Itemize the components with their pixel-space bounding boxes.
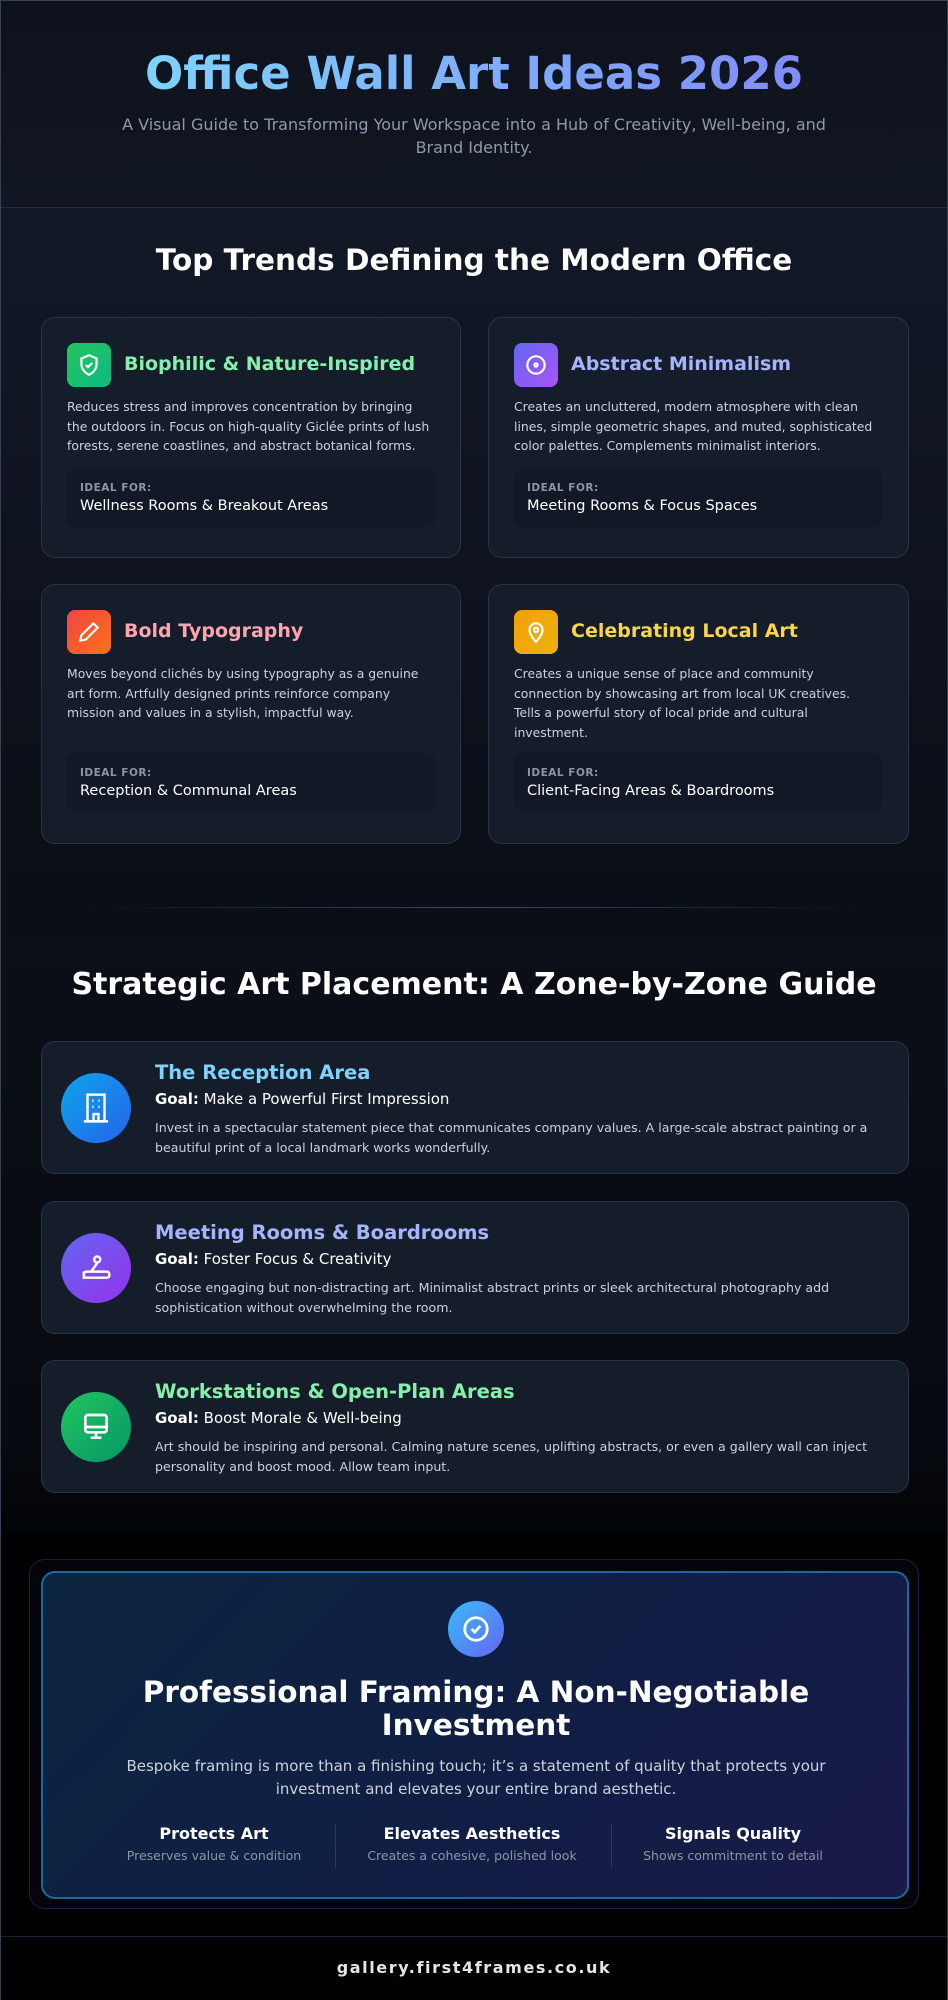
zone goal: Goal: Boost Morale & Well-being [155,1409,402,1427]
ideal for [67,468,435,527]
card title: Bold Typography [124,620,303,642]
framing text: Bespoke framing is more than a finishing touch; it’s a statement of quality that protects your investment and elevates your entire brand aesthetic. [126,1757,826,1798]
divider line [81,907,867,908]
zone text: Choose engaging but non-distracting art. Minimalist abstract prints or sleek architectural photography add sophistication without overwhelming the room. [155,1280,829,1315]
ideal for [67,753,435,812]
stat: protects: Protects Art [159,1824,269,1843]
icon: compass [514,343,558,387]
icon: presentation [61,1233,131,1303]
zone text: Art should be inspiring and personal. Calming nature scenes, uplifting abstracts, or even a gallery wall can inject personality and boost mood. Allow team input. [155,1439,867,1474]
footer [1,1936,947,2000]
icon: pen [67,610,111,654]
card: local art [488,584,909,844]
ideal for: IDEAL FOR: [80,767,152,779]
ideal for: Wellness Rooms & Breakout Areas [80,498,328,514]
zone goal: Goal: Make a Powerful First Impression [155,1090,449,1108]
zone: workstations [41,1360,909,1493]
section: trends [1,208,947,933]
card title: Abstract Minimalism [571,353,791,375]
ideal for: Meeting Rooms & Focus Spaces [527,498,757,514]
ideal for: Reception & Communal Areas [80,783,297,799]
zone title: The Reception Area [155,1061,370,1084]
ideal for: IDEAL FOR: [527,482,599,494]
icon: monitor [61,1392,131,1462]
footer: gallery.first4frames.co.uk [337,1958,611,1977]
icon: building [61,1073,131,1143]
card text: Moves beyond clichés by using typography as a genuine art form. Artfully designed prints reinforce company mission and values in a stylish, impactful way. [67,666,418,720]
placement heading: Strategic Art Placement: A Zone-by-Zone Guide [71,967,877,1002]
stat: quality [643,1824,823,1863]
stat: elevates [367,1824,577,1863]
card: biophilic [41,317,461,558]
icon: check circle [448,1601,504,1657]
icon: shield [67,343,111,387]
card title: Celebrating Local Art [571,620,798,642]
zone goal: Goal: Foster Focus & Creativity [155,1250,391,1268]
title: Office Wall Art Ideas 2026 [145,47,803,100]
ideal for: Client-Facing Areas & Boardrooms [527,783,774,799]
card text: Creates an uncluttered, modern atmosphere with clean lines, simple geometric shapes, and muted, sophisticated color palettes. Complements minimalist interiors. [514,399,872,453]
panel: framing [41,1571,909,1899]
card text: Reduces stress and improves concentration by bringing the outdoors in. Focus on high-quality Giclée prints of lush forests, serene coastlines, and abstract botanical forms. [67,399,429,453]
trends heading: Top Trends Defining the Modern Office [156,243,792,277]
zone text: Invest in a spectacular statement piece that communicates company values. A large-scale abstract painting or a beautiful print of a local landmark works wonderfully. [155,1120,867,1155]
ideal for [514,753,882,812]
zone title: Meeting Rooms & Boardrooms [155,1221,489,1244]
divider [335,1824,336,1868]
stat: elevates: Elevates Aesthetics [384,1824,560,1843]
stat: protects: Preserves value & condition [127,1848,301,1863]
stat: elevates: Creates a cohesive, polished look [367,1848,577,1863]
stat: protects [127,1824,301,1863]
framing outer box [29,1559,919,1909]
header [1,1,947,208]
subtitle: A Visual Guide to Transforming Your Workspace into a Hub of Creativity, Well-being, and Brand Identity. [122,115,826,157]
zone title: Workstations & Open-Plan Areas [155,1380,515,1403]
stat: quality: Shows commitment to detail [643,1848,823,1863]
card: abstract [488,317,909,558]
ideal for: IDEAL FOR: [527,767,599,779]
card: typography [41,584,461,844]
card text: Creates a unique sense of place and community connection by showcasing art from local UK creatives. Tells a powerful story of local pride and cultural investment. [514,666,850,740]
section: placement [1,933,947,1533]
zone: reception [41,1041,909,1174]
zone: meeting rooms [41,1201,909,1334]
ideal for [514,468,882,527]
stat: quality: Signals Quality [665,1824,801,1843]
framing title: Professional Framing: A Non-Negotiable Investment [143,1675,809,1742]
icon: pin [514,610,558,654]
ideal for: IDEAL FOR: [80,482,152,494]
divider [611,1824,612,1868]
card title: Biophilic & Nature-Inspired [124,353,415,375]
